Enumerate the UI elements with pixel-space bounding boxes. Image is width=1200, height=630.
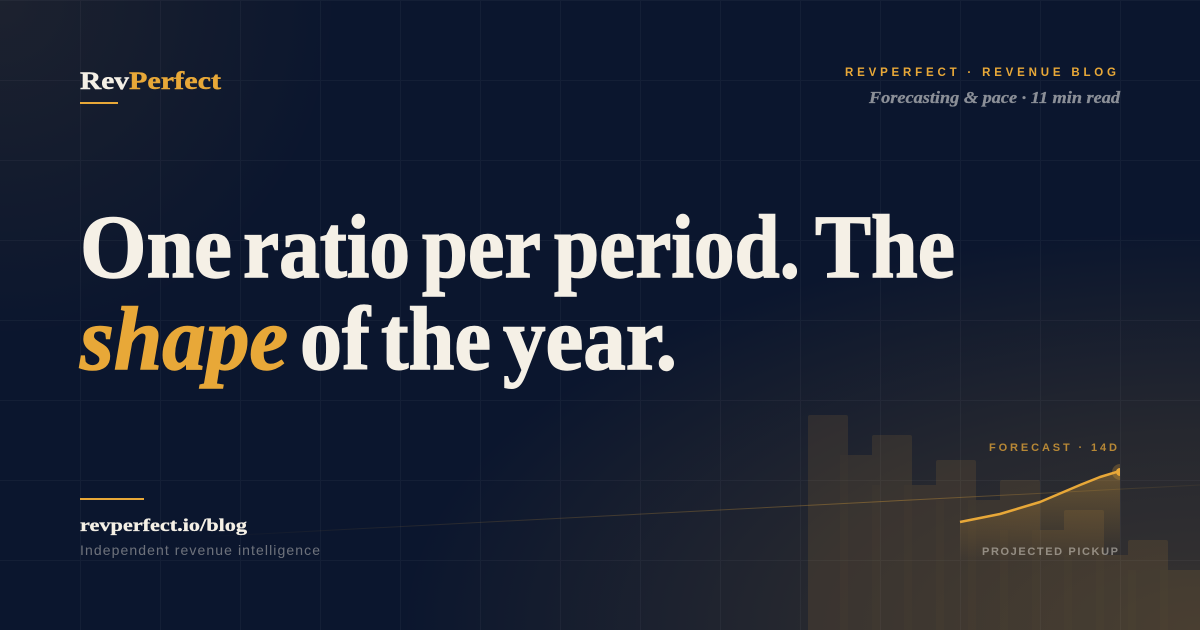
bar overlaps	[840, 455, 1168, 630]
logo	[80, 68, 222, 95]
headline: per	[422, 198, 541, 297]
footer tagline: Independent revenue intelligence	[80, 542, 320, 558]
article meta: Forecasting & pace · 11 min read	[868, 88, 1121, 107]
headline: One	[80, 198, 232, 297]
footer rule	[80, 498, 144, 500]
logo underline	[80, 102, 118, 104]
logo wordmark: Perfect: Perfect	[129, 68, 222, 95]
forecast chart: pickup curve	[960, 464, 1120, 548]
footer url: revperfect.io/blog	[80, 515, 247, 535]
headline: The	[815, 198, 955, 297]
headline: year.	[503, 290, 677, 389]
forecast line	[960, 471, 1120, 522]
headline	[79, 198, 955, 389]
headline: period.	[554, 198, 800, 297]
bar chart: background occupancy bars	[808, 415, 1200, 630]
projected pickup label: PROJECTED PICKUP	[982, 546, 1118, 558]
headline accent: shape	[79, 290, 288, 389]
headline: ratio	[243, 198, 410, 297]
headline: the	[381, 290, 491, 389]
trend line: thin diagonal rule	[200, 485, 1200, 537]
eyebrow label: REVPERFECT · REVENUE BLOG	[845, 67, 1116, 79]
logo wordmark: Rev: Rev	[80, 68, 130, 95]
forecast end point	[1112, 464, 1120, 480]
forecast area fill	[960, 474, 1120, 548]
headline: of	[300, 290, 371, 389]
forecast label: FORECAST · 14D	[989, 442, 1117, 454]
